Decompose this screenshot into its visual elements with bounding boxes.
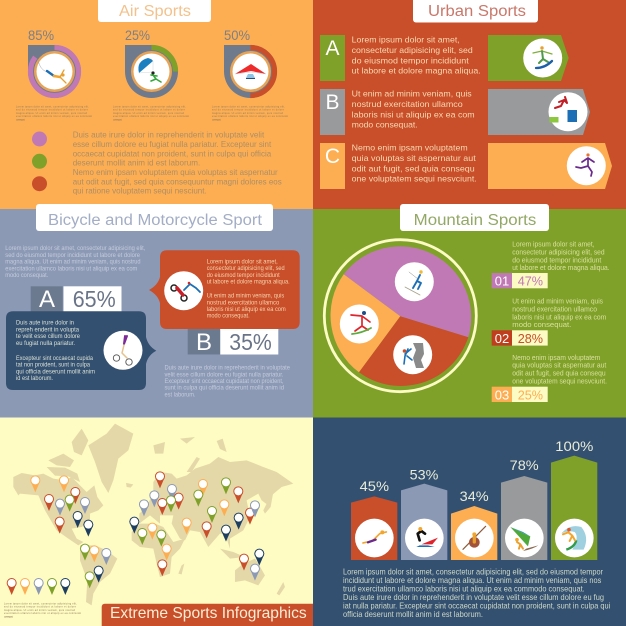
icon: parachutist [138,58,161,82]
item A text: do eiusmod tempor incididunt [352,55,469,65]
stat: 25 percent parachute [125,27,178,98]
pie label 01: 01 [495,274,509,289]
pie item 1 text: do eiusmod tempor incididunt [512,255,601,264]
bar chart text [343,567,610,619]
bar 53 percent jet ski [401,467,447,560]
stat: 50 percent hang glider: 50% [224,27,250,43]
pie label 03: 25% [518,387,543,402]
pie label 03 [492,387,548,402]
legend text: aut odit aut fugit, sed quia consequuntur magni dolores eos [73,176,282,186]
item C text: quia voluptas sit aspernatur aut [352,153,476,163]
bar chart text: Lorem ipsum dolor sit amet, consectetur adipisicing elit, sed do eiusmod tempor [343,567,603,576]
bar chart text: trud exercitation ullamco laboris nisi ut aliquip ex ea commodo consequat. [343,584,585,593]
bar chart text: incididunt ut labore et dolore magna aliqua. Ut enim ad minim veniam, quis nos [343,576,601,585]
caption text 3: exercitation ullamco laboris nisi ut aliquip ex ea commodo [212,115,289,118]
closing text: Duis aute irure dolor in reprehenderit in voluptate [164,364,291,371]
callout: motorcycle: nostrud exercitation ullamco [207,299,280,306]
map caption [4,602,82,618]
closing text: Excepteur sint occaecat cupidatat non proident, [164,378,284,385]
heading: mountain sports: Mountain Sports [414,212,537,229]
caption text 3 [212,106,289,121]
pie item 3 text [512,353,607,386]
caption text 2: Lorem ipsum dolor sit amet, consectetur adipisicing elit, [113,106,186,108]
stat: 85 percent skydiver: 85% [28,27,54,43]
caption text 3: consequat. [212,118,221,121]
pie label 01 [492,273,548,289]
legend text: Nemo enim ipsam voluptatem quia voluptas sit aspernatur [73,167,278,177]
map caption: consequat. [4,615,13,618]
icon: hang glider [235,64,266,78]
item B text: laboris nisi ut aliquip ex ea com [352,109,475,119]
intro text [5,245,146,279]
caption text 1: exercitation ullamco laboris nisi ut aliquip ex ea commodo [16,115,93,118]
map caption: sed do eiusmod tempor incididunt ut labore et dolore [4,606,77,609]
item B arrow with parkour [488,89,590,135]
bar 100 percent surf: 100% [555,438,593,454]
callout: motorcycle: consectetur adipisicing elit, sed [207,265,285,272]
pie item 2 text: modo consequat. [512,320,571,329]
pie item 3 text: Nemo enim ipsam voluptatem [512,353,600,362]
heading: bicycle and motorcycle sport: Bicycle and Motorcycle Sport [48,212,263,229]
callout: motorcycle: ut labore et dolore magna aliqua. [207,279,290,286]
caption text 2 [113,106,190,121]
icon: parkour [550,97,577,122]
stat B 35 percent [188,329,278,356]
callout: motorcycle: do eiusmod tempor incididunt [207,272,280,279]
callout: bicycle: Excepteur sint occaecat cupida [16,355,93,362]
bar 78 percent windsurf [501,457,547,560]
closing text: sunt in culpa qui officia deserunt mollit anim id [164,385,285,392]
item A label [320,35,345,81]
intro text: exercitation ullamco laboris nisi ut aliquip ex ea com [5,265,137,272]
pie label 01: 47% [518,274,543,289]
bar 34 percent kayak: 34% [460,488,489,504]
callout: bicycle: id est laborum. [16,375,53,382]
bar chart text: officia deserunt mollit anim id est laborum. [343,610,483,619]
closing text: velit esse cillum dolore eu fugiat nulla pariatur. [164,371,284,378]
icon: skateboarder [533,46,552,68]
item C text [352,143,477,184]
bar 53 percent jet ski: 53% [410,467,438,483]
map caption: exercitation ullamco laboris nisi ut aliquip ex ea commodo [4,612,82,615]
item C text: odit aut fugit, sed quia consequ [352,163,475,173]
legend text: occaecat cupidatat non proident, sunt in culpa qui officia [73,148,272,158]
bar 100 percent surf [551,438,597,560]
callout: motorcycle: laboris nisi ut aliquip ex ea com [207,306,286,313]
callout: bicycle: repreh enderit in volupta [16,326,80,333]
bar 78 percent windsurf: 78% [510,457,539,473]
pie item 2 text: laboris nisi ut aliquip ex ea com [512,312,606,321]
pie item 1 text: Lorem ipsum dolor sit amet, [512,240,595,249]
item A text: consectetur adipisicing elit, sed [352,45,473,55]
icon: runner [576,153,594,176]
caption text 2: consequat. [113,118,122,121]
panel: bicycle and motorcycle sport [0,204,313,418]
pie item 3 text: quia voluptas sit aspernatur aut [512,361,606,370]
callout: motorcycle: Ut enim ad minim veniam, quis [207,293,284,300]
stat: 50 percent hang glider [224,27,277,98]
callout: bicycle: te velit esse cillum dolore [16,333,81,340]
closing text: est laborum. [164,391,196,398]
pie chart [324,240,476,392]
legend text [73,130,282,196]
callout: bicycle [6,311,156,390]
icon: motocross rider [171,282,200,301]
item C text: Nemo enim ipsam voluptatem [352,143,468,153]
item A arrow with skateboarder [488,35,569,81]
item C text: one voluptatem sequi nesvciunt. [352,174,477,184]
pin legend [7,578,70,595]
main title: Extreme Sports Infographics [110,605,307,622]
icon: snowboarder [351,311,371,334]
item A text: Lorem ipsum dolor sit amet, [352,35,460,45]
item B text: modo consequat. [352,120,418,130]
caption text 1: sed do eiusmod tempor incididunt ut labore et dolore [16,109,89,112]
panel: water sports bars [313,418,626,626]
world map [10,424,293,605]
heading: urban sports: Urban Sports [428,3,526,20]
item B label: B [325,91,340,114]
caption text 3: magna aliqua. Ut enim ad minim veniam, quis nostrud [212,112,284,115]
item A text [352,35,481,76]
callout: bicycle: qui officia deserunt mollit anim [16,369,95,376]
heading: bicycle and motorcycle sport [36,204,273,231]
map caption: Lorem ipsum dolor sit amet, consectetur adipisicing elit, [4,602,77,606]
panel: mountain sports [313,204,626,418]
callout: motorcycle: modo consequat. [207,313,250,320]
caption text 2: exercitation ullamco laboris nisi ut aliquip ex ea commodo [113,115,190,118]
item C label [320,143,345,189]
item C arrow with runner [488,143,612,189]
map caption: magna aliqua. Ut enim ad minim veniam, quis nostrud [4,609,76,612]
panel: air sports [0,0,313,209]
caption text 1 [16,106,93,121]
callout: bicycle: eu fugiat nulla pariatur. [16,340,75,347]
callout: motorcycle: Lorem ipsum dolor sit amet, [207,258,278,265]
intro text: Lorem ipsum dolor sit amet, consectetur adipisicing elit, [5,245,146,252]
caption text 1: consequat. [16,118,25,121]
caption text 3: sed do eiusmod tempor incididunt ut labore et dolore [212,109,285,112]
panel: world map [0,418,317,626]
pie item 2 text: Ut enim ad minim veniam, quis [512,296,603,305]
stat A 65 percent [31,286,122,313]
bar chart text: Duis aute irure dolor in reprehenderit in voluptate velit esse cillum dolore eu fug [343,593,604,602]
pie item 2 text: nostrud exercitation ullamco [512,304,597,313]
icon: skier [405,270,423,295]
item A text: ut labore et dolore magna aliqua. [352,66,481,76]
icon: bmx rider [113,336,132,365]
intro text: modo consequat. [5,272,49,279]
stat A 65 percent: A [39,286,55,313]
panel: urban sports [313,0,626,209]
closing text [164,364,291,398]
heading: mountain sports [400,204,549,231]
stat A 65 percent: 65% [73,286,116,312]
legend text: deserunt mollit anim id est laborum. [73,158,200,168]
item B text: Ut enim ad minim veniam, quis [352,89,472,99]
icon: rock climber [403,343,424,368]
legend text: Duis aute irure dolor in reprehenderit in voluptate velit [73,130,265,140]
heading: air sports: Air Sports [119,3,191,20]
pie item 1 text: consectetur adipisicing elit, sed [512,248,605,257]
callout: motorcycle [149,250,300,329]
item C label: C [325,145,340,168]
heading: urban sports [413,0,538,22]
pie item 1 text: ut labore et dolore magna aliqua. [512,263,610,272]
caption text 1: magna aliqua. Ut enim ad minim veniam, quis nostrud [16,112,88,115]
item B label [320,89,345,135]
pie label 02 [492,330,548,346]
intro text: sed do eiusmod tempor incididunt ut labore et dolore [5,252,141,259]
icon: skydiver [38,60,66,83]
pie item 3 text: one voluptatem sequi nesvciunt. [512,377,607,386]
callout: bicycle: tat non proident, sunt in culpa [16,362,91,369]
caption text 2: magna aliqua. Ut enim ad minim veniam, quis nostrud [113,112,185,115]
stat: 85 percent skydiver [28,27,81,98]
caption text 1: Lorem ipsum dolor sit amet, consectetur adipisicing elit, [16,106,89,108]
pie item 1 text [512,240,610,272]
pie item 2 text [512,296,606,329]
bar chart [351,438,597,560]
legend text: esse cillum dolore eu fugiat nulla pariatur. Excepteur sint [73,139,272,149]
bar 45 percent diving [351,478,397,560]
map pins [30,471,264,588]
heading: air sports [98,0,211,22]
callout: bicycle: Duis aute irure dolor in [16,320,75,327]
pie item 3 text: odit aut fugit, sed quia consequ [512,369,606,378]
bar 45 percent diving: 45% [360,478,389,494]
stat B 35 percent: 35% [229,329,272,355]
caption text 3: Lorem ipsum dolor sit amet, consectetur adipisicing elit, [212,106,285,108]
stat: 25 percent parachute: 25% [125,27,150,43]
pie label 02: 02 [495,331,509,346]
bar 34 percent kayak [451,488,497,560]
item A label: A [325,37,340,60]
pie label 02: 28% [518,331,543,346]
legend text: qui ratione voluptatem sequi nesciunt. [73,186,207,196]
pie label 03: 03 [495,387,509,402]
caption text 2: sed do eiusmod tempor incididunt ut labore et dolore [113,109,186,112]
item B text: nostrud exercitation ullamco [352,99,463,109]
stat B 35 percent: B [196,329,212,356]
intro text: magna aliqua. Ut enim ad minim veniam, quis nostrud [5,259,141,266]
legend dots [32,132,47,191]
item B text [352,89,475,130]
